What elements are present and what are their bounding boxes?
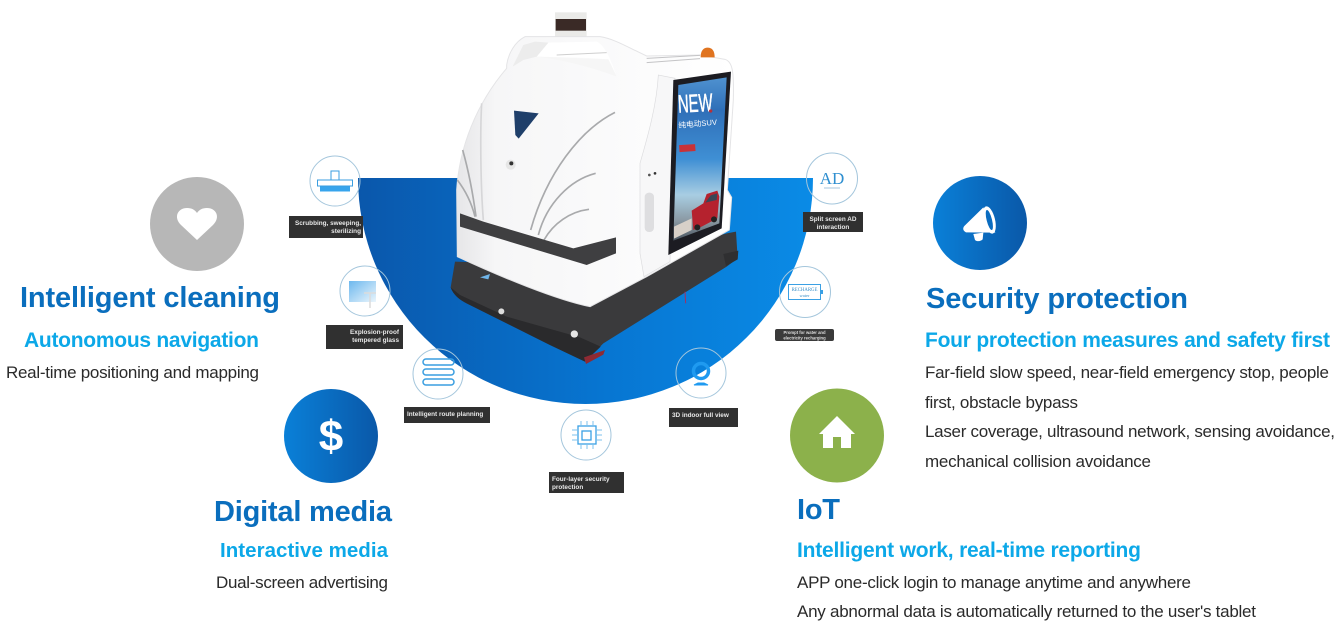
body: [797, 573, 1256, 621]
feature: indoor view: [669, 348, 738, 427]
feature: security chip: [549, 410, 624, 493]
side panel seam: [640, 75, 675, 277]
body: Real-time positioning and mapping: [6, 363, 259, 382]
ad headline: NEW: [677, 89, 714, 119]
feature: scrubbing: [289, 156, 363, 238]
label: protection: [552, 484, 583, 491]
body: Far-field slow speed, near-field emergency stop, people: [925, 363, 1329, 382]
icon: scrub brush: [310, 156, 360, 206]
icon: dollar: [284, 389, 378, 483]
icon: 3D view pin: [676, 348, 726, 398]
panel: security protection: [925, 283, 1335, 471]
label: electricity recharging: [783, 336, 826, 340]
ad subline: 纯电动SUV: [678, 117, 718, 130]
body: [925, 363, 1335, 471]
label: Four-layer security: [552, 476, 610, 483]
label: Explosion-proof: [350, 329, 400, 336]
icon: dollar: $: [319, 412, 343, 461]
icon: glass pane: [340, 266, 390, 316]
label: Scrubbing, sweeping,: [295, 220, 361, 227]
icon: serpentine route: [413, 349, 463, 399]
heading: Digital media: [214, 496, 393, 528]
heading: IoT: [797, 494, 840, 526]
side vents: [645, 193, 654, 232]
panel: IoT: [797, 494, 1256, 621]
body: APP one-click login to manage anytime and anywhere: [797, 573, 1191, 592]
label: [803, 212, 863, 232]
camera: [506, 160, 516, 170]
panel: intelligent cleaning: [6, 282, 280, 382]
body: first, obstacle bypass: [925, 393, 1078, 412]
label: [775, 329, 834, 341]
robot base: [451, 232, 738, 362]
shell grooves: [457, 103, 615, 240]
subheading: Interactive media: [220, 539, 389, 562]
icon: megaphone: [933, 176, 1027, 270]
icon: chip: [561, 410, 611, 460]
label: sterilizing: [331, 228, 361, 235]
advertising screen: [668, 72, 731, 255]
heading: Security protection: [926, 283, 1188, 315]
label: [549, 472, 624, 493]
blue semicircle backdrop: [358, 178, 813, 404]
body: mechanical collision avoidance: [925, 452, 1151, 471]
label: Intelligent route planning: [407, 411, 483, 418]
feature: split screen AD: [803, 153, 863, 232]
label: [326, 325, 403, 349]
feature: tempered glass: [326, 266, 403, 349]
feature: recharge prompt: [775, 266, 834, 341]
robot shell: [457, 37, 733, 307]
icon: AD letters: AD: [820, 169, 844, 188]
icon: battery: [780, 266, 830, 318]
shell stripe: [460, 213, 616, 265]
icon: battery: RECHARGE: [792, 288, 817, 293]
icon: heart: [150, 177, 244, 271]
icon: battery: water: [800, 293, 810, 298]
robot: [451, 12, 738, 364]
body: Laser coverage, ultrasound network, sensing avoidance,: [925, 422, 1335, 441]
subheading: Autonomous navigation: [24, 329, 259, 352]
label: tempered glass: [352, 337, 399, 344]
feature: route planning: [404, 349, 490, 423]
label: Split screen AD: [810, 216, 857, 223]
subheading: Intelligent work, real-time reporting: [797, 539, 1141, 562]
panel: digital media: [214, 496, 393, 592]
label: interaction: [817, 224, 849, 231]
warning lamp: [701, 48, 715, 57]
subheading: Four protection measures and safety first: [925, 329, 1330, 352]
body: Dual-screen advertising: [216, 573, 388, 592]
sensor mast: [555, 12, 587, 37]
handle opening: [537, 42, 617, 77]
label: Prompt for water and: [783, 330, 826, 335]
logo badge: [514, 111, 539, 139]
body: Any abnormal data is automatically returned to the user's tablet: [797, 602, 1256, 621]
red car: [692, 191, 719, 230]
icon: home: [790, 388, 884, 482]
label: 3D indoor full view: [672, 412, 729, 419]
heading: Intelligent cleaning: [20, 282, 280, 314]
label: [289, 216, 363, 238]
